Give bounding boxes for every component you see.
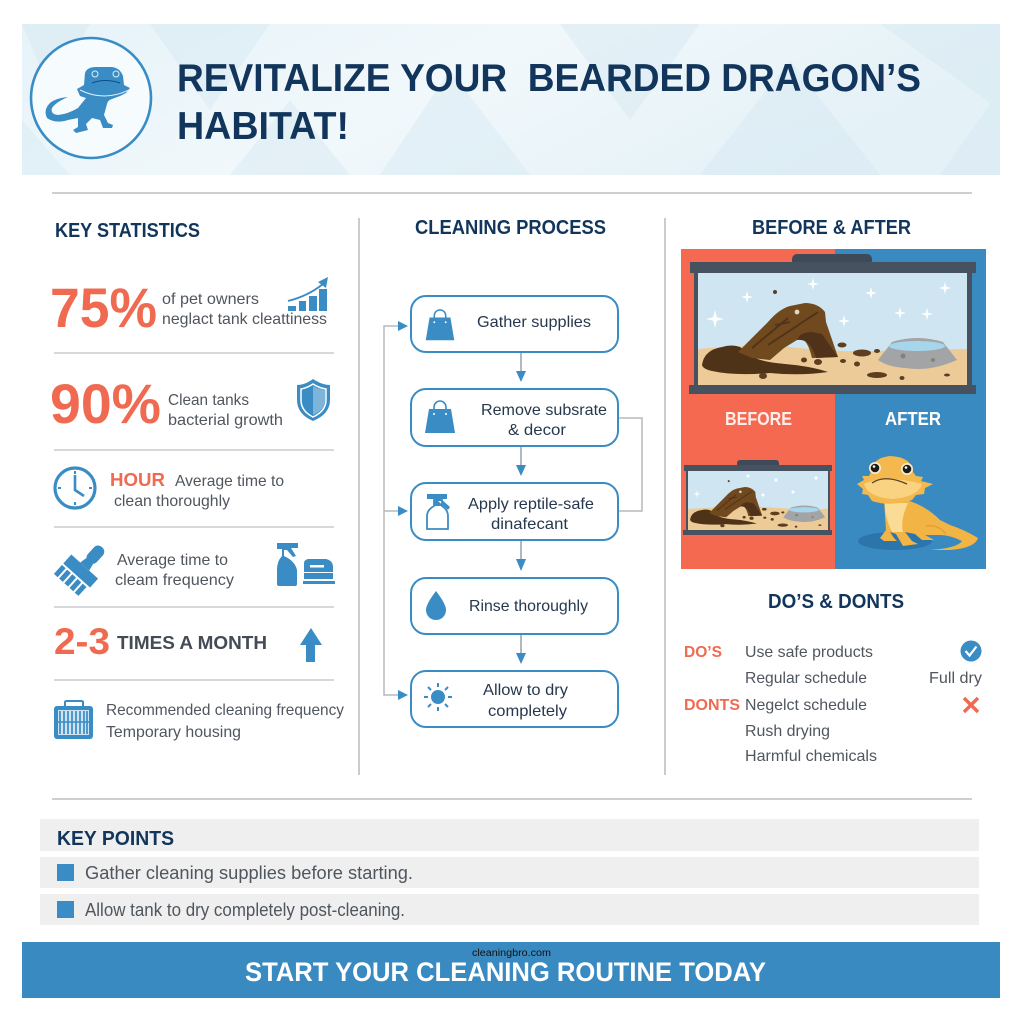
connectors	[384, 321, 642, 700]
stat: 90%: bacterial growth	[168, 412, 283, 429]
step: gather supplies	[411, 296, 618, 352]
panel: key points	[40, 819, 979, 925]
title: REVITALIZE YOUR BEARDED DRAGON’S	[177, 57, 921, 100]
panel: before and after	[681, 217, 986, 569]
stat: 2-3 times a month: 2-3	[54, 621, 110, 662]
stat: hour: HOUR	[110, 470, 165, 490]
step: apply disinfectant: dinafecant	[491, 516, 569, 533]
stat: 75%: neglact tank cleattiness	[162, 311, 327, 328]
icon: up arrow	[300, 628, 322, 662]
icon: spray bottle and machine	[277, 543, 335, 586]
panel: do's and don'ts	[684, 591, 982, 765]
stat: cleaning frequency: cleam frequency	[115, 572, 234, 589]
point 1: Gather cleaning supplies before starting.	[85, 863, 413, 883]
panel: do's and don'ts: DONTS	[684, 697, 740, 714]
panel: do's and don'ts: Use safe products	[745, 644, 873, 661]
step: remove substrate: Remove subsrate	[481, 402, 607, 419]
step: rinse	[411, 578, 618, 634]
icon: check	[960, 640, 982, 662]
stat: 90%	[50, 372, 330, 435]
panel: do's and don'ts: DO’S	[684, 644, 722, 661]
stat: temporary housing	[54, 701, 344, 741]
heading: do's and don'ts: DO’S & DONTS	[768, 591, 904, 613]
stat: 90%: Clean tanks	[168, 392, 249, 409]
step: dry	[411, 671, 618, 727]
background split	[681, 249, 986, 569]
header banner	[22, 24, 1000, 175]
stat: hour	[55, 468, 284, 510]
icon: shield	[297, 379, 330, 421]
panel: do's and don'ts: Regular schedule	[745, 670, 867, 687]
stat: temporary housing: Recommended cleaning frequency	[106, 702, 344, 719]
panel: do's and don'ts: Harmful chemicals	[745, 748, 877, 765]
panel: do's and don'ts: Negelct schedule	[745, 697, 867, 714]
stat: 2-3 times a month: TIMES A MONTH	[117, 632, 267, 653]
icon: cross	[964, 698, 978, 712]
stat: 75%: of pet owners	[162, 291, 259, 308]
stat: cleaning frequency: Average time to	[117, 552, 228, 569]
call to action: START YOUR CLEANING ROUTINE TODAY	[245, 957, 766, 987]
step: remove substrate: & decor	[508, 422, 567, 439]
heading: key points: KEY POINTS	[57, 828, 174, 850]
point 2: Allow tank to dry completely post-cleaning.	[85, 900, 405, 920]
small tank	[683, 460, 832, 535]
stat: 75%: 75%	[50, 276, 157, 339]
step: rinse: Rinse thoroughly	[469, 598, 588, 615]
panel: key statistics	[50, 220, 344, 741]
step: apply disinfectant: Apply reptile-safe	[468, 496, 594, 513]
title: HABITAT!	[177, 105, 349, 148]
panel: do's and don'ts: Rush drying	[745, 723, 830, 740]
label: after: AFTER	[885, 409, 941, 429]
panel: do's and don'ts: Full dry	[929, 670, 982, 687]
stat: hour: clean thoroughly	[114, 493, 230, 510]
sparkles	[706, 278, 951, 328]
heading: before and after: BEFORE & AFTER	[752, 217, 911, 239]
illustration: happy bearded dragon	[857, 456, 978, 550]
title	[177, 57, 921, 148]
panel: cleaning process	[384, 217, 642, 727]
stat: hour: Average time to	[175, 473, 284, 490]
stat: cleaning frequency	[54, 535, 335, 598]
footer banner	[22, 942, 1000, 998]
logo: bearded dragon in circle	[31, 38, 151, 158]
stat: 75%	[50, 276, 328, 339]
step: dry: Allow to dry	[483, 682, 568, 699]
stat: 90%: 90%	[50, 372, 161, 435]
icon: rising bar chart	[288, 277, 328, 311]
large tank	[689, 254, 976, 394]
step: remove substrate	[411, 389, 618, 446]
heading: key statistics: KEY STATISTICS	[55, 220, 200, 242]
stat: temporary housing: Temporary housing	[106, 724, 241, 741]
label: before: BEFORE	[725, 409, 792, 429]
step: apply disinfectant	[411, 483, 618, 540]
icon: brush	[54, 535, 115, 598]
icon: crate	[54, 701, 93, 739]
stat: 2-3 times a month	[54, 621, 322, 662]
heading: cleaning process: CLEANING PROCESS	[415, 217, 606, 239]
step: dry: completely	[488, 703, 567, 720]
icon: clock	[55, 468, 95, 508]
watermark: cleaningbro.com	[472, 948, 551, 959]
step: gather supplies: Gather supplies	[477, 314, 591, 331]
